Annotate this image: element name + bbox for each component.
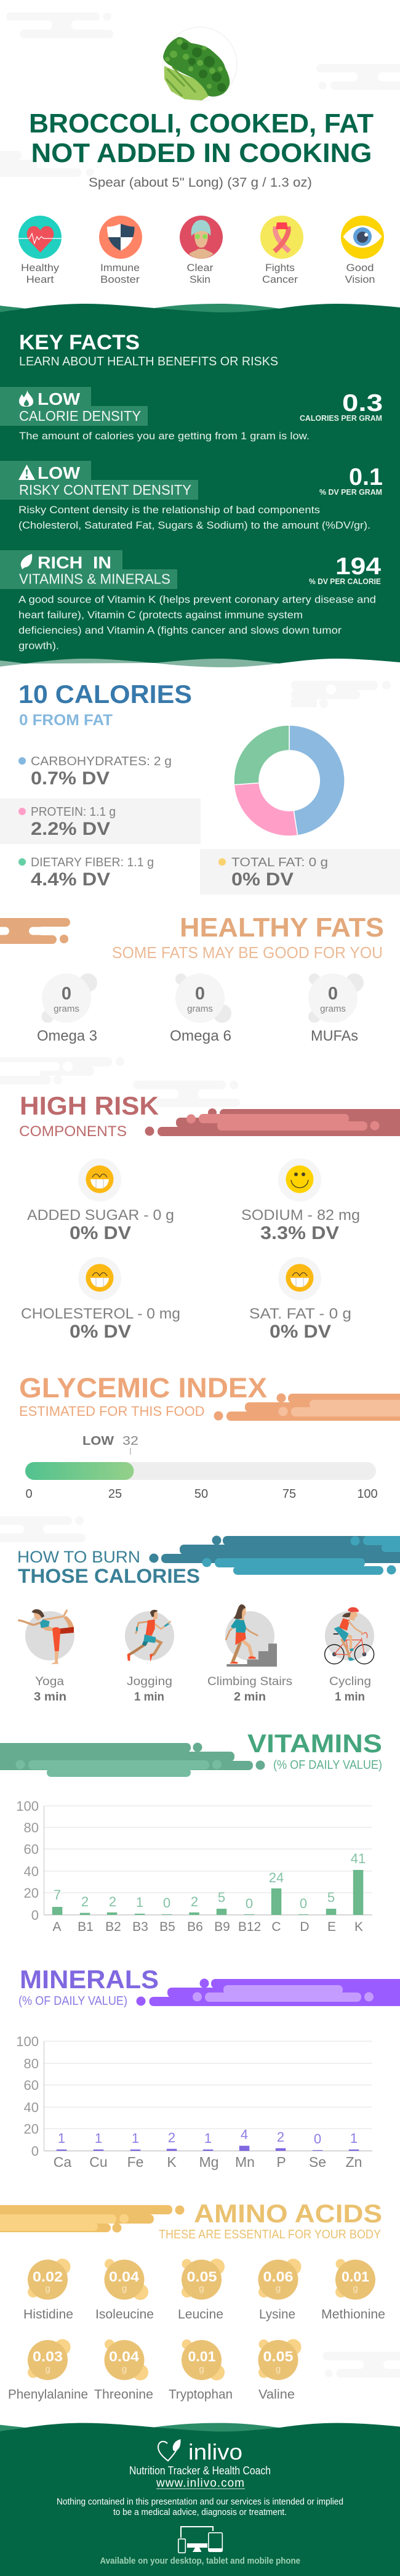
panel: key facts [0, 304, 400, 667]
disclaimer [57, 2497, 343, 2517]
fact: rich in vitamins and minerals: heart failure), Vitamin C (protects against immune system [18, 610, 303, 621]
amino: threonine: g [122, 2364, 127, 2375]
bar chart: minerals: Ca [54, 2154, 71, 2170]
decorative banner: amino acids [0, 2205, 185, 2233]
bar chart: vitamins: 2 [109, 1894, 116, 1909]
legend: protein [0, 798, 201, 844]
heading: glycemic index [19, 1372, 267, 1419]
bar chart: vitamins: 0 [163, 1895, 170, 1911]
legend: protein: 2.2% DV [31, 819, 110, 839]
risk item: saturated fat: 0% DV [270, 1322, 331, 1342]
heading: minerals [18, 1965, 159, 2008]
donut chart [234, 725, 345, 836]
bar chart: minerals: 2 [277, 2129, 284, 2145]
heading: key facts: LEARN ABOUT HEALTH BENEFITS OR RISKS [19, 355, 278, 368]
panel: healthy fats [0, 912, 384, 1044]
icon: healthy heart: Healthy [21, 262, 60, 274]
tagline and website: www.inlivo.com [156, 2477, 244, 2490]
amino: valine: g [276, 2364, 281, 2375]
icon: flame [19, 390, 33, 407]
amino: tryptophan: g [199, 2364, 204, 2375]
bar chart: minerals: P [276, 2154, 286, 2170]
decorative banner: vitamins [0, 1742, 265, 1777]
heading: glycemic index: ESTIMATED FOR THIS FOOD [19, 1404, 204, 1419]
panel: minerals [16, 1965, 400, 2170]
risk item: cholesterol: CHOLESTEROL - 0 mg [21, 1306, 180, 1322]
heading: how to burn: THOSE CALORIES [18, 1565, 200, 1587]
heading: amino acids: THESE ARE ESSENTIAL FOR YOUR BODY [159, 2228, 381, 2241]
bar chart: minerals: 1 [132, 2131, 139, 2146]
bar chart: minerals: 20 [24, 2121, 39, 2137]
gauge scale: 75 [282, 1487, 296, 1501]
decorative banner: burn [149, 1535, 400, 1575]
bar chart: vitamins: K [354, 1920, 363, 1934]
availability note: Available on your desktop, tablet and mobile phone [100, 2556, 300, 2566]
amino: tryptophan [169, 2339, 233, 2402]
icon: immune booster: Immune [100, 262, 140, 274]
amino: methionine: g [353, 2283, 358, 2294]
fact: calorie density [0, 387, 383, 442]
fact: rich in vitamins and minerals: growth). [18, 641, 59, 652]
stat: omega 6: Omega 6 [170, 1028, 231, 1044]
amino: threonine [94, 2339, 153, 2402]
heading: healthy fats [112, 912, 384, 962]
amino: lysine: g [276, 2283, 281, 2294]
heading: high risk: HIGH RISK [20, 1091, 159, 1120]
bar chart: vitamins: B2 [105, 1920, 121, 1934]
decorative banner: healthy fats [0, 918, 70, 944]
bar chart: vitamins: 24 [269, 1870, 284, 1885]
panel: how to burn those calories [17, 1535, 400, 1704]
icon: clear skin: Skin [190, 274, 210, 285]
bar chart: vitamins: B1 [78, 1920, 94, 1934]
heading: vitamins: (% OF DAILY VALUE) [273, 1758, 382, 1772]
gauge bar [25, 1462, 376, 1480]
risk item: saturated fat [249, 1257, 351, 1342]
activity: jogging: Jogging [127, 1675, 172, 1688]
icon: leaf [21, 554, 32, 569]
amino: tryptophan: Tryptophan [169, 2387, 233, 2402]
amino: methionine [321, 2259, 385, 2322]
bar chart: minerals: 1 [95, 2131, 102, 2146]
icon: fights cancer [260, 216, 303, 285]
fact: risky content density: Risky Content density is the relationship of bad components [18, 505, 320, 516]
amino: methionine: 0.01 [342, 2269, 369, 2285]
bar chart: minerals: 60 [24, 2078, 39, 2093]
disclaimer: Nothing contained in this presentation and our services is intended or implied [57, 2497, 343, 2507]
amino: phenylalanine: g [45, 2364, 50, 2375]
amino: histidine [23, 2259, 73, 2322]
amino: threonine: Threonine [94, 2387, 153, 2402]
heading: healthy fats: HEALTHY FATS [180, 912, 384, 943]
icon: broccoli photo in ring [163, 27, 237, 101]
logo: inlivo: inlivo [188, 2439, 242, 2464]
icon: fights cancer: Fights [265, 262, 295, 274]
amino: leucine: g [199, 2283, 204, 2294]
amino: isoleucine: Isoleucine [95, 2307, 154, 2322]
bar chart: minerals: K [167, 2154, 177, 2170]
icon: healthy heart [18, 216, 62, 285]
fact: risky content density: RISKY CONTENT DENSITY [19, 482, 191, 498]
activity: climbing stairs: 2 min [234, 1690, 266, 1704]
fact: rich in vitamins and minerals: VITAMINS & MINERALS [19, 571, 170, 587]
amino: leucine [178, 2259, 225, 2322]
bar chart: vitamins: 100 [16, 1798, 39, 1814]
fact: calorie density: The amount of calories you are getting from 1 gram is low. [19, 431, 310, 442]
amino: lysine [258, 2259, 302, 2322]
bar chart: minerals: 0 [314, 2131, 321, 2147]
gauge scale: 50 [194, 1487, 208, 1501]
stat: mufas: 0 [328, 984, 338, 1004]
activity: yoga [19, 1609, 74, 1704]
amino: threonine: 0.04 [109, 2349, 139, 2365]
icon: immune booster: Booster [100, 274, 140, 285]
bar chart: minerals: 0 [31, 2143, 39, 2159]
bar chart: vitamins: D [300, 1920, 310, 1934]
amino: histidine: Histidine [23, 2307, 73, 2322]
gauge marker [82, 1434, 138, 1455]
fact: calorie density: LOW [38, 389, 81, 408]
legend: protein: PROTEIN: 1.1 g [31, 805, 116, 819]
amino: tryptophan: 0.01 [188, 2349, 215, 2365]
bar chart: vitamins [16, 1798, 372, 1934]
stat: omega 3: Omega 3 [37, 1028, 97, 1044]
bar chart: minerals: 1 [350, 2131, 358, 2146]
stat: omega 3: grams [54, 1004, 79, 1014]
bar chart: vitamins: B6 [187, 1920, 203, 1934]
serving size: Spear (about 5" Long) (37 g / 1.3 oz) [89, 176, 312, 190]
activity: cycling: 1 min [335, 1690, 365, 1704]
fact: risky content density: LOW [38, 463, 81, 482]
bar chart: vitamins: 2 [81, 1894, 89, 1909]
amino: histidine: 0.02 [33, 2269, 63, 2285]
gauge marker: 32 [122, 1434, 138, 1448]
activity: yoga: Yoga [35, 1675, 64, 1688]
bar chart: vitamins: 7 [54, 1887, 61, 1903]
fact: calorie density: 0.3 [342, 390, 383, 416]
bar chart: vitamins: C [271, 1920, 281, 1934]
heading: glycemic index: GLYCEMIC INDEX [19, 1372, 267, 1404]
decorative banner: minerals [137, 1979, 400, 2006]
panel: calories [0, 680, 400, 895]
heading: vitamins [247, 1729, 382, 1772]
bar chart: vitamins: 5 [218, 1890, 225, 1905]
amino: isoleucine: g [122, 2283, 127, 2294]
heading: healthy fats: SOME FATS MAY BE GOOD FOR YOU [112, 943, 383, 962]
fact: risky content density: % DV PER GRAM [319, 488, 382, 497]
legend: carbohydrates [18, 755, 172, 789]
stat: omega 6: 0 [195, 984, 205, 1004]
bar chart: minerals: Mn [235, 2154, 255, 2170]
heading: amino acids: AMINO ACIDS [194, 2199, 382, 2228]
logo: inlivo [158, 2439, 242, 2464]
bar chart: vitamins: B12 [238, 1920, 261, 1934]
icon: good vision: Vision [345, 274, 375, 285]
risk item: cholesterol: 0% DV [70, 1322, 131, 1342]
fact: rich in vitamins and minerals: % DV PER CALORIE [309, 577, 381, 586]
icon: good vision: Good [346, 262, 374, 274]
amino: isoleucine: 0.04 [109, 2269, 139, 2285]
activity: jogging [125, 1610, 174, 1704]
bar chart: vitamins: B5 [159, 1920, 175, 1934]
legend: dietary fiber: 4.4% DV [31, 869, 110, 890]
icon: good vision [341, 216, 384, 285]
bar chart: vitamins: 5 [327, 1890, 335, 1905]
gauge scale [25, 1487, 378, 1501]
heading: minerals: MINERALS [20, 1965, 159, 1994]
panel: glycemic index [19, 1372, 400, 1501]
panel: high risk components [19, 1091, 400, 1342]
amino: leucine: Leucine [178, 2307, 223, 2322]
activity: cycling [325, 1607, 374, 1704]
fact: rich in vitamins and minerals: A good source of Vitamin K (helps prevent coronary artery disease and [18, 595, 376, 606]
stat: omega 6: grams [187, 1004, 213, 1014]
risk item: added sugar: 0% DV [70, 1223, 131, 1243]
bar chart: vitamins: E [327, 1920, 336, 1934]
bar chart: vitamins: 0 [300, 1896, 307, 1911]
heading: calories: 10 CALORIES [18, 680, 192, 709]
heading: how to burn [17, 1548, 200, 1587]
fact: rich in vitamins and minerals: deficiencies) and Vitamin A (fights cancer and slows down tumor [18, 625, 342, 636]
title: NOT ADDED IN COOKING [31, 138, 372, 168]
bar chart: minerals: Zn [346, 2154, 362, 2170]
disclaimer: to be a medical advice, diagnosis or treatment. [113, 2507, 287, 2517]
bar chart: vitamins: 1 [136, 1895, 143, 1910]
bar chart: vitamins: 0 [246, 1896, 253, 1911]
bar chart: vitamins: 60 [24, 1842, 39, 1857]
risk item: saturated fat: SAT. FAT - 0 g [249, 1306, 351, 1322]
bar chart: minerals: 2 [168, 2130, 175, 2145]
risk item: sodium [241, 1158, 360, 1243]
bar chart: vitamins: B3 [132, 1920, 148, 1934]
bar chart: minerals: 4 [241, 2127, 248, 2142]
amino: lysine: Lysine [259, 2307, 295, 2322]
legend: dietary fiber: DIETARY FIBER: 1.1 g [31, 856, 154, 869]
heading: high risk: COMPONENTS [19, 1123, 127, 1140]
gauge scale: 0 [25, 1487, 33, 1501]
stat: mufas [308, 973, 364, 1044]
bar chart: minerals: 1 [204, 2131, 212, 2146]
bar chart: vitamins: A [52, 1920, 62, 1934]
title [29, 108, 374, 168]
legend: total fat [200, 849, 400, 895]
amino: lysine: 0.06 [263, 2269, 293, 2285]
bar chart: vitamins: 40 [24, 1864, 39, 1879]
heading: vitamins: VITAMINS [247, 1729, 382, 1758]
bar chart: minerals: Cu [89, 2154, 108, 2170]
stat: omega 3: 0 [62, 984, 71, 1004]
heading: calories: 0 FROM FAT [19, 712, 113, 729]
heading: amino acids [159, 2199, 382, 2241]
tagline and website: Nutrition Tracker & Health Coach [129, 2464, 271, 2477]
bar chart: vitamins: 20 [24, 1885, 39, 1901]
bar chart: vitamins: 80 [24, 1820, 39, 1835]
legend: total fat: 0% DV [231, 869, 294, 890]
risk item: sodium: 3.3% DV [260, 1223, 339, 1243]
legend: dietary fiber [18, 856, 154, 890]
decorative banner: glycemic [214, 1394, 400, 1421]
activity: cycling: Cycling [329, 1675, 371, 1688]
bar chart: vitamins: B9 [214, 1920, 230, 1934]
heading: key facts: KEY FACTS [19, 331, 140, 354]
activity: climbing stairs [207, 1604, 292, 1704]
amino: phenylalanine: 0.03 [33, 2349, 63, 2365]
bar chart: minerals: Se [309, 2154, 326, 2170]
panel: amino acids [0, 2199, 385, 2402]
amino: valine: Valine [258, 2387, 295, 2402]
amino: methionine: Methionine [321, 2307, 385, 2322]
fact: calorie density: CALORIES PER GRAM [300, 414, 382, 423]
gauge scale: 25 [108, 1487, 122, 1501]
amino: phenylalanine: Phenylalanine [8, 2387, 88, 2402]
bar chart: minerals: 80 [24, 2056, 39, 2071]
risk item: added sugar [27, 1158, 174, 1243]
icon: clear skin [180, 216, 223, 285]
fact: rich in vitamins and minerals: 194 [335, 553, 381, 580]
stat: mufas: MUFAs [311, 1028, 358, 1044]
activity: jogging: 1 min [134, 1690, 164, 1704]
icon: clear skin: Clear [187, 262, 214, 274]
fact: calorie density: CALORIE DENSITY [19, 408, 141, 424]
bar chart: vitamins: 41 [351, 1851, 366, 1866]
tagline and website [129, 2464, 271, 2490]
footer [0, 2423, 400, 2576]
icon: immune booster [99, 216, 142, 285]
risk item: added sugar: ADDED SUGAR - 0 g [27, 1207, 174, 1224]
heading: how to burn: HOW TO BURN [17, 1548, 140, 1566]
gauge marker: LOW [82, 1434, 114, 1448]
amino: valine: 0.05 [263, 2349, 293, 2365]
bar chart: vitamins: 2 [191, 1894, 198, 1909]
bar chart: minerals [16, 2034, 372, 2170]
bar chart: minerals: Fe [127, 2154, 143, 2170]
heading: minerals: (% OF DAILY VALUE) [18, 1994, 127, 2008]
icon: warning triangle [18, 465, 35, 480]
gauge scale: 100 [357, 1487, 378, 1501]
activity: climbing stairs: Climbing Stairs [207, 1675, 292, 1688]
amino: histidine: g [45, 2283, 50, 2294]
legend: carbohydrates: CARBOHYDRATES: 2 g [31, 755, 172, 768]
amino: phenylalanine [8, 2339, 88, 2402]
bar chart: vitamins: 0 [31, 1908, 39, 1923]
stat: mufas: grams [320, 1004, 346, 1014]
fact: risky content density: (Cholesterol, Saturated Fat, Sugars & Sodium) to the amount (%DV/gr). [18, 520, 370, 531]
panel: vitamins [0, 1729, 382, 1934]
icon: healthy heart: Heart [26, 274, 54, 285]
bar chart: minerals: 1 [58, 2131, 65, 2146]
decorative banner: high risk [145, 1108, 400, 1136]
title: BROCCOLI, COOKED, FAT [29, 108, 374, 139]
activity: yoga: 3 min [34, 1690, 66, 1704]
stat: omega 6 [170, 973, 231, 1044]
fact: risky content density: 0.1 [349, 464, 383, 490]
health benefit icons [18, 216, 384, 285]
heading: calories [18, 680, 192, 729]
bar chart: minerals: 100 [16, 2034, 39, 2049]
amino: valine [258, 2339, 302, 2402]
heading: key facts [19, 331, 278, 368]
heading: high risk [19, 1091, 159, 1140]
amino: leucine: 0.05 [187, 2269, 217, 2285]
legend: total fat: TOTAL FAT: 0 g [231, 856, 328, 869]
legend: carbohydrates: 0.7% DV [31, 768, 110, 789]
stat: omega 3 [37, 973, 97, 1044]
bar chart: minerals: 40 [24, 2100, 39, 2115]
bar chart: minerals: Mg [199, 2154, 218, 2170]
header: food image, title and serving [29, 27, 374, 190]
amino: isoleucine [95, 2259, 154, 2322]
risk item: sodium: SODIUM - 82 mg [241, 1207, 360, 1224]
icon: fights cancer: Cancer [262, 274, 298, 285]
fact: rich in vitamins and minerals [0, 550, 381, 652]
fact: rich in vitamins and minerals: RICH IN [38, 553, 111, 572]
icon: devices [178, 2527, 222, 2553]
fact: risky content density [0, 461, 383, 531]
risk item: cholesterol [21, 1257, 180, 1342]
